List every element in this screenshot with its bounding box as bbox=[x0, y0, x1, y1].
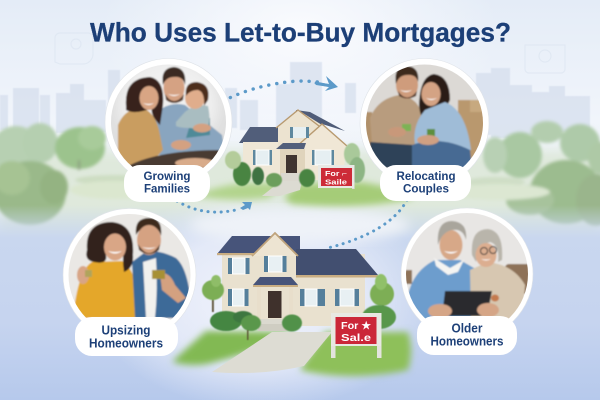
small house back roof bbox=[296, 110, 345, 132]
label: Upsizing Homeowners: Homeowners bbox=[89, 336, 163, 350]
arrow: right dotted arc from large house to Relocating Couples bbox=[328, 200, 407, 248]
walkway bbox=[212, 332, 332, 373]
background: faded city skyline bbox=[0, 62, 590, 138]
label: Relocating Couples: Relocating bbox=[396, 169, 456, 183]
label: Older Homeowners bbox=[417, 316, 517, 355]
label: Upsizing Homeowners: Upsizing bbox=[102, 324, 150, 338]
background: trees and meadow band bbox=[0, 121, 600, 240]
small house with lawn bbox=[195, 110, 415, 206]
label: Growing Families: Families bbox=[144, 182, 190, 196]
large for sale sign: For ★ bbox=[341, 320, 372, 332]
arrow: top dotted arc from Growing Families to Relocating Couples bbox=[216, 76, 338, 105]
right tree bbox=[370, 274, 394, 310]
label: Relocating Couples: Couples bbox=[403, 182, 449, 196]
label: Growing Families: Growing bbox=[144, 169, 190, 183]
large house roofs bbox=[217, 233, 378, 278]
panel: Growing Families bbox=[105, 58, 232, 172]
large lawn right bbox=[300, 332, 411, 376]
small porch and door bbox=[276, 143, 306, 181]
large lawn left bbox=[172, 331, 294, 365]
panel: Upsizing Homeowners bbox=[62, 208, 196, 324]
panel: Relocating Couples bbox=[360, 58, 489, 172]
label: Upsizing Homeowners bbox=[75, 317, 178, 356]
large shrubs bbox=[210, 305, 396, 340]
photo: couple with keys bbox=[68, 214, 190, 320]
small lawn bbox=[195, 180, 415, 206]
large porch and door bbox=[253, 277, 298, 331]
small for sale sign: Saile bbox=[325, 178, 347, 186]
small house roof left bbox=[239, 127, 282, 143]
small for sale sign: For ⌐ bbox=[325, 169, 348, 178]
title: Who Uses Let-to-Buy Mortgages? bbox=[90, 18, 511, 48]
photo ring bbox=[63, 208, 196, 342]
label: Older Homeowners: Homeowners bbox=[430, 334, 504, 348]
background: lower blue wash bbox=[0, 190, 600, 400]
large house with lawn bbox=[172, 233, 411, 376]
photo: couple bbox=[366, 64, 483, 168]
label: Older Homeowners: Older bbox=[452, 322, 483, 336]
arrow: lower dotted arc to small house bbox=[177, 201, 252, 212]
photo ring bbox=[105, 58, 232, 186]
large for sale sign bbox=[331, 313, 382, 358]
small for sale sign bbox=[318, 165, 355, 189]
small house windows bbox=[253, 127, 334, 165]
photo: family bbox=[111, 64, 226, 168]
background: faint padlock and house watermarks bbox=[55, 33, 565, 73]
large house walls bbox=[222, 254, 365, 326]
gable outlines bbox=[276, 110, 347, 147]
large for sale sign: Sal.e bbox=[341, 332, 371, 344]
large tree bbox=[202, 275, 224, 312]
photo: older couple with tablet bbox=[406, 213, 528, 318]
label: Relocating Couples bbox=[380, 165, 471, 201]
label: Growing Families bbox=[124, 165, 210, 202]
small house walls bbox=[243, 142, 343, 180]
small shrubs bbox=[225, 143, 365, 187]
photo ring bbox=[401, 208, 533, 340]
panel: Older Homeowners bbox=[401, 208, 534, 322]
photo ring bbox=[360, 58, 489, 188]
large house windows bbox=[228, 256, 359, 306]
